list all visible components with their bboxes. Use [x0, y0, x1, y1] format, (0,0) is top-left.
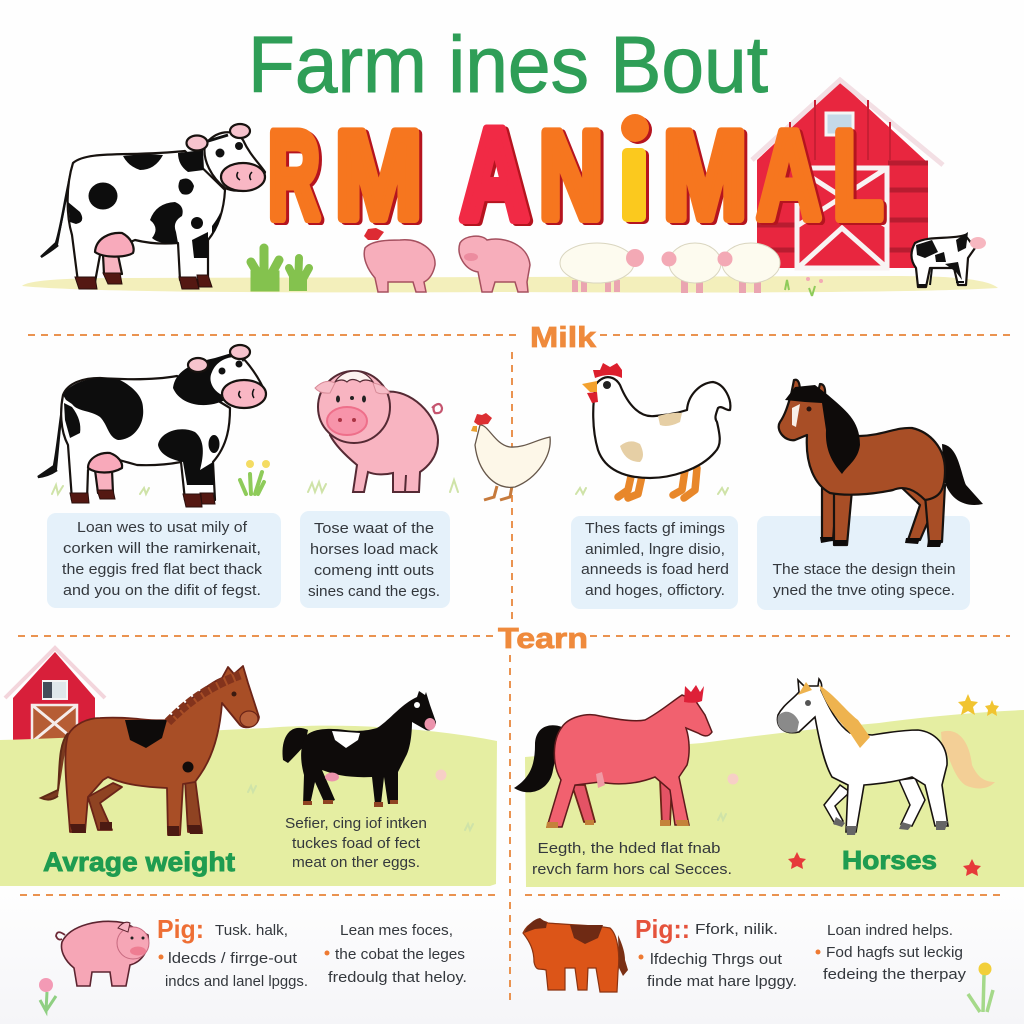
text block: pig left: ldecds / firrge-out — [168, 950, 298, 967]
text block: pig left: indcs and lanel lpggs. — [165, 973, 308, 990]
panel: info card 3: Thes facts gf imings — [585, 520, 725, 537]
text block: pig right: Ffork, nilik. — [695, 921, 778, 938]
panel: right meadow — [525, 710, 1024, 887]
icon: cow — [38, 345, 266, 507]
text block: notes left: the cobat the leges — [335, 946, 465, 963]
text block: left meadow note: Sefier, cing iof intken — [285, 815, 427, 832]
title line: Farm ines Bout — [248, 20, 768, 109]
panel: info card 2: comeng intt outs — [314, 562, 434, 579]
icon: flower — [39, 978, 56, 1011]
icon: white horse — [777, 679, 995, 835]
panel: info card 2: Tose waat of the — [314, 520, 434, 537]
panel: info card 3 — [571, 516, 738, 609]
section divider: middle — [18, 635, 1010, 637]
text block: pig right: Pig:: — [635, 914, 690, 944]
ground strip — [22, 276, 998, 292]
text block: notes right — [816, 922, 967, 983]
icon: small cow top right — [911, 232, 986, 287]
banner title: A — [757, 107, 821, 245]
icon: black horse — [282, 691, 436, 807]
panel: info card 2: sines cand the egs. — [308, 583, 440, 600]
text block: pig right — [635, 914, 797, 990]
text block: pig left: Tusk. halk, — [215, 922, 288, 939]
icon: red barn — [752, 80, 943, 268]
text block: left meadow note — [285, 815, 427, 871]
text block: pig right: lfdechig Thrgs out — [650, 951, 783, 968]
section divider: bottom — [20, 894, 1000, 896]
panel: left meadow — [0, 726, 497, 886]
icon: brown animal bottom — [523, 918, 628, 992]
panel: info card 3: animled, lngre disio, — [585, 541, 725, 558]
icon: brown horse left — [41, 666, 259, 836]
icon: grass tufts — [251, 248, 309, 288]
text block: notes left: fredoulg that heloy. — [328, 969, 467, 986]
banner title: A — [460, 101, 529, 247]
panel: info card 2: horses load mack — [310, 541, 439, 558]
icon: brown horse — [779, 380, 983, 547]
panel: info card 1: and you on the difit of fegst. — [63, 582, 261, 599]
banner title: M — [335, 107, 422, 245]
panel: info card 3: and hoges, offictory. — [585, 582, 725, 599]
panel: info card 3: anneeds is foad herd — [581, 561, 729, 578]
text block: notes right: Fod hagfs sut leckig — [826, 944, 963, 961]
icon: large cow top — [41, 124, 265, 289]
panel: info card 1 — [47, 513, 281, 608]
icon: grass and flowers — [52, 460, 728, 494]
icon: hen — [582, 363, 730, 498]
text block: notes left: Lean mes foces, — [340, 922, 453, 939]
label: Avrage weight: Avrage weight — [43, 847, 235, 877]
panel: info card 4: The stace the design thein — [772, 561, 956, 578]
panel: info card 1: corken will the ramirkenait, — [63, 540, 261, 557]
label: Horses: Horses — [842, 845, 937, 875]
text block: pig left: Pig: — [157, 914, 204, 944]
banner title: M — [663, 107, 747, 245]
text block: notes right: fedeing the therpay — [823, 966, 967, 983]
panel: info card 1: the eggis fred flat bect thack — [62, 561, 263, 578]
banner title: L — [833, 107, 883, 245]
icon: sheep flock — [560, 243, 780, 293]
text block: pig left — [157, 914, 308, 990]
section divider: vertical lower — [509, 655, 511, 1000]
panel: info card 4 — [757, 516, 970, 610]
banner title: R — [268, 107, 320, 245]
banner title — [268, 101, 883, 247]
text block: notes right: Loan indred helps. — [827, 922, 953, 939]
panel: info card 2 — [300, 511, 450, 608]
section divider: top — [28, 334, 1012, 336]
text block: right meadow note — [532, 840, 732, 878]
icon: pink horse — [514, 685, 712, 828]
text block: left meadow note: meat on ther eggs. — [292, 854, 420, 871]
text block: notes left — [324, 922, 467, 986]
panel: info card 4: yned the tnve oting spece. — [773, 582, 955, 599]
icon: tulip — [968, 962, 993, 1012]
text block: left meadow note: tuckes foad of fect — [292, 835, 421, 852]
icon: pig — [315, 371, 442, 492]
icon: small pigs — [364, 228, 530, 292]
text block: pig right: finde mat hare lpggy. — [647, 973, 797, 990]
icon: pink pig bottom — [56, 921, 149, 986]
heading: Milk: Milk — [530, 322, 597, 354]
heading: Tearn: Tearn — [498, 623, 588, 655]
section divider: vertical upper — [511, 352, 513, 620]
banner title: N — [539, 107, 603, 245]
icon: stars and flowers — [248, 694, 999, 876]
text block: right meadow note: revch farm hors cal Secces. — [532, 861, 732, 878]
icon: small hen — [471, 413, 550, 500]
icon: small barn — [5, 648, 105, 742]
icon: small flowers on ground — [785, 277, 823, 296]
panel: info card 1: Loan wes to usat mily of — [77, 519, 248, 536]
text block: right meadow note: Eegth, the hded flat fnab — [538, 840, 720, 857]
